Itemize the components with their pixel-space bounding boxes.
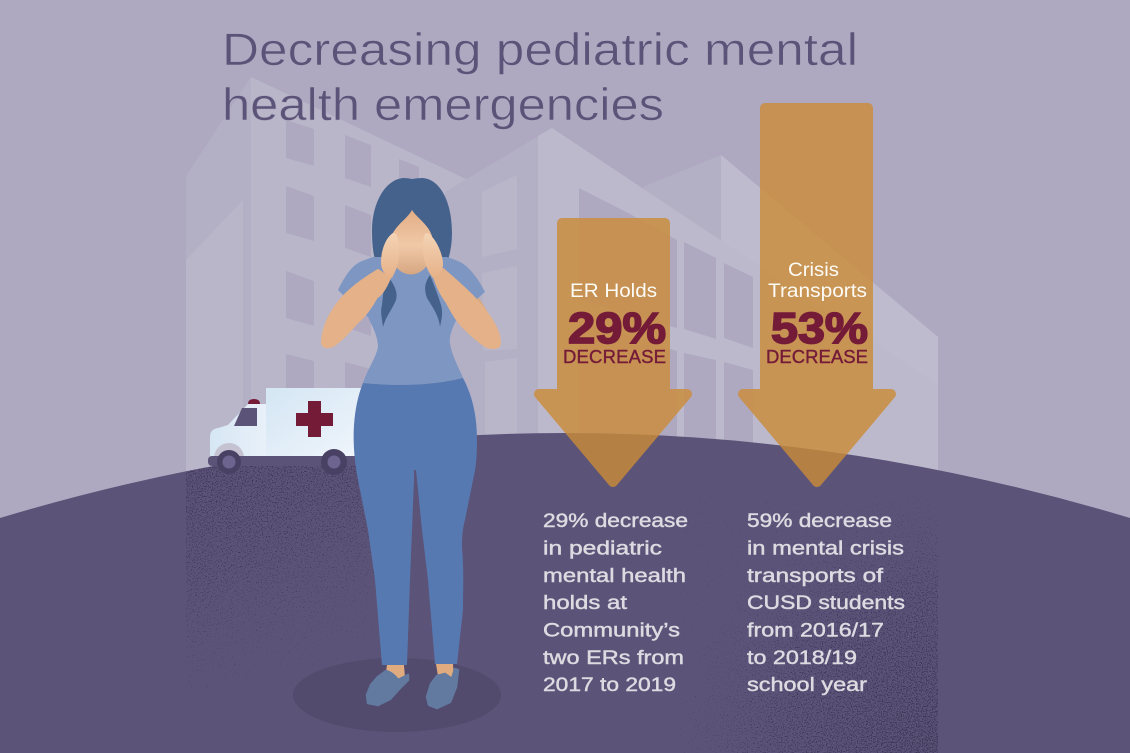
front wheel arch	[214, 443, 244, 458]
left shoe	[367, 671, 408, 705]
crisis transports description: to 2018/19	[747, 648, 857, 669]
main building windows	[286, 120, 419, 400]
ER holds description: Community’s	[543, 620, 680, 642]
crisis transports label: Crisis	[788, 260, 839, 281]
left hand	[381, 233, 399, 278]
ground shadow	[293, 658, 501, 732]
hair locks	[381, 275, 442, 327]
grain texture right	[680, 495, 938, 753]
left building wing	[186, 77, 251, 500]
ER holds description: two ERs from	[543, 648, 684, 669]
cab window	[234, 408, 257, 426]
hospital buildings	[186, 77, 938, 500]
centre side wall windows	[482, 175, 517, 460]
ambulance box	[266, 388, 362, 458]
right rear building	[643, 155, 938, 500]
shirt	[338, 257, 485, 385]
ER holds decrease label: DECREASE	[563, 346, 666, 367]
title	[222, 24, 858, 130]
centre building side wall	[445, 128, 552, 500]
title: Decreasing pediatric mental	[222, 24, 858, 75]
crisis transports description: school year	[747, 675, 868, 696]
ER holds description: 2017 to 2019	[543, 675, 676, 696]
arrow: ER holds	[539, 223, 687, 482]
hair back	[372, 178, 452, 272]
crisis transports decrease label: DECREASE	[766, 346, 868, 367]
ambulance	[208, 388, 363, 475]
siren	[248, 399, 260, 404]
pants	[354, 378, 477, 665]
ER holds description: holds at	[543, 593, 628, 614]
right hand	[423, 233, 443, 278]
ambulance cab	[210, 404, 266, 458]
centre building facade	[538, 128, 938, 500]
ER holds description: in pediatric	[543, 538, 662, 560]
front wheel	[217, 450, 241, 474]
title: health emergencies	[222, 79, 664, 130]
left wing lower panel	[186, 200, 243, 500]
centre facade windows	[579, 188, 753, 480]
crisis transports description: CUSD students	[747, 593, 905, 614]
crisis transports description: in mental crisis	[747, 538, 904, 560]
ankles	[386, 664, 454, 684]
rear wheel	[321, 449, 347, 475]
arrow: crisis transports	[743, 108, 891, 482]
ER holds description: mental health	[543, 566, 686, 587]
red cross	[296, 401, 333, 437]
upper arms	[323, 290, 500, 343]
face	[391, 210, 433, 274]
crisis transports description: 59% decrease	[747, 511, 892, 532]
crisis transports percentage: 53%	[771, 304, 868, 353]
ER holds percentage: 29%	[568, 304, 666, 353]
right rear building lit face	[721, 155, 938, 500]
crisis transports description: from 2016/17	[747, 620, 884, 642]
right shoe	[427, 669, 458, 708]
chassis	[208, 456, 363, 466]
left forearm	[322, 270, 390, 347]
ground hill	[0, 433, 1130, 753]
crisis transports label	[768, 260, 867, 302]
ER holds description: 29% decrease	[543, 511, 688, 532]
main building facade	[251, 77, 470, 500]
person	[322, 178, 500, 708]
grain texture left	[186, 466, 379, 690]
right forearm	[434, 269, 500, 348]
ER holds description	[543, 511, 688, 696]
crisis transports description: transports of	[747, 566, 884, 587]
crisis transports label: Transports	[768, 281, 867, 302]
crisis transports description	[747, 511, 905, 696]
ER holds label: ER Holds	[570, 281, 657, 302]
